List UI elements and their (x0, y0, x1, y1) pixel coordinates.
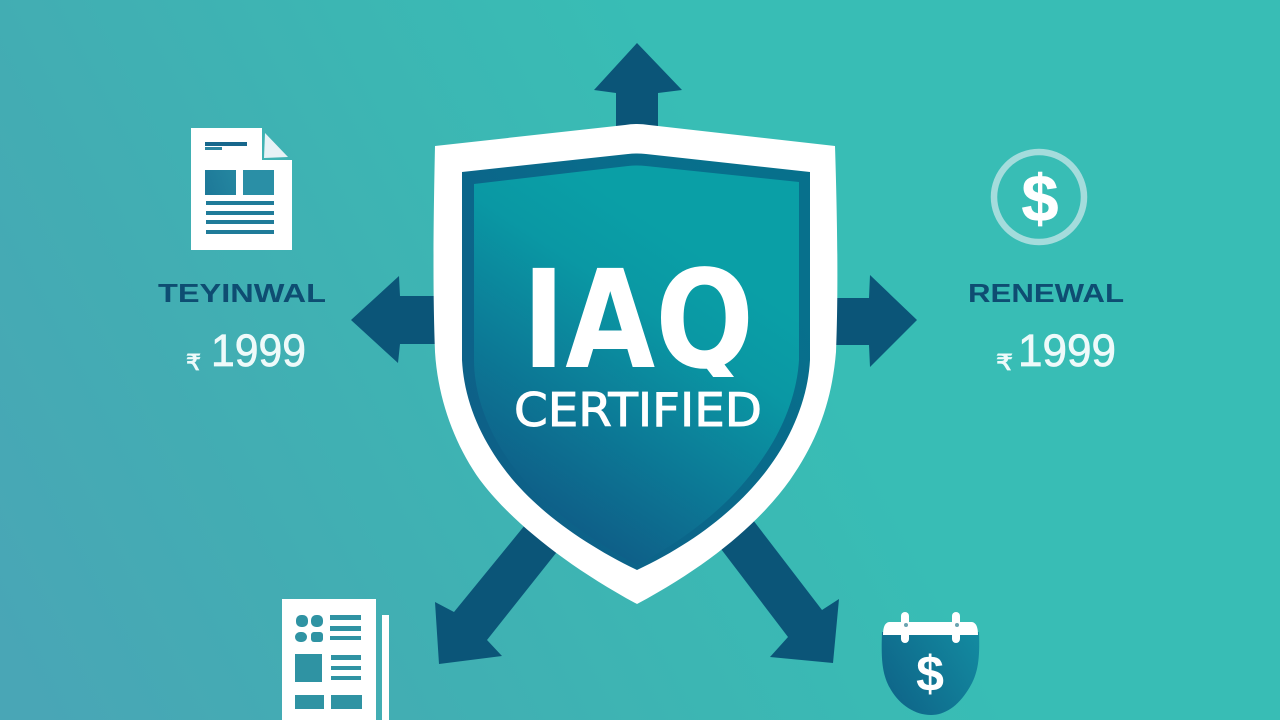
arrow: right (830, 275, 917, 367)
arrow: bottom left (435, 525, 560, 664)
icon: calendar with dollar (882, 612, 979, 715)
price: right: 1999 (1018, 325, 1116, 376)
arrow: up (594, 43, 682, 130)
shield badge (434, 124, 837, 604)
label: TEYINWAL: TEYINWAL (158, 278, 326, 308)
price: left: 1999 (211, 325, 306, 376)
icon: document bottom left (282, 599, 389, 720)
label: RENEWAL: RENEWAL (968, 278, 1124, 308)
shield: inner panel (474, 166, 799, 565)
shield: white outer (434, 124, 837, 604)
arrow: bottom right (718, 520, 839, 663)
icon: document top left (191, 128, 292, 250)
price: right: ₹ (996, 350, 1013, 375)
icon: dollar coin: $ (1022, 161, 1058, 235)
icon: calendar with dollar: $ (916, 646, 944, 702)
icon: dollar coin (994, 152, 1084, 242)
shield subtitle: CERTIFIED: CERTIFIED (514, 383, 762, 437)
arrow: left (351, 276, 440, 363)
shield: dark rim (462, 154, 810, 570)
price: left: ₹ (186, 350, 201, 375)
shield title: IAQ: IAQ (522, 242, 754, 400)
